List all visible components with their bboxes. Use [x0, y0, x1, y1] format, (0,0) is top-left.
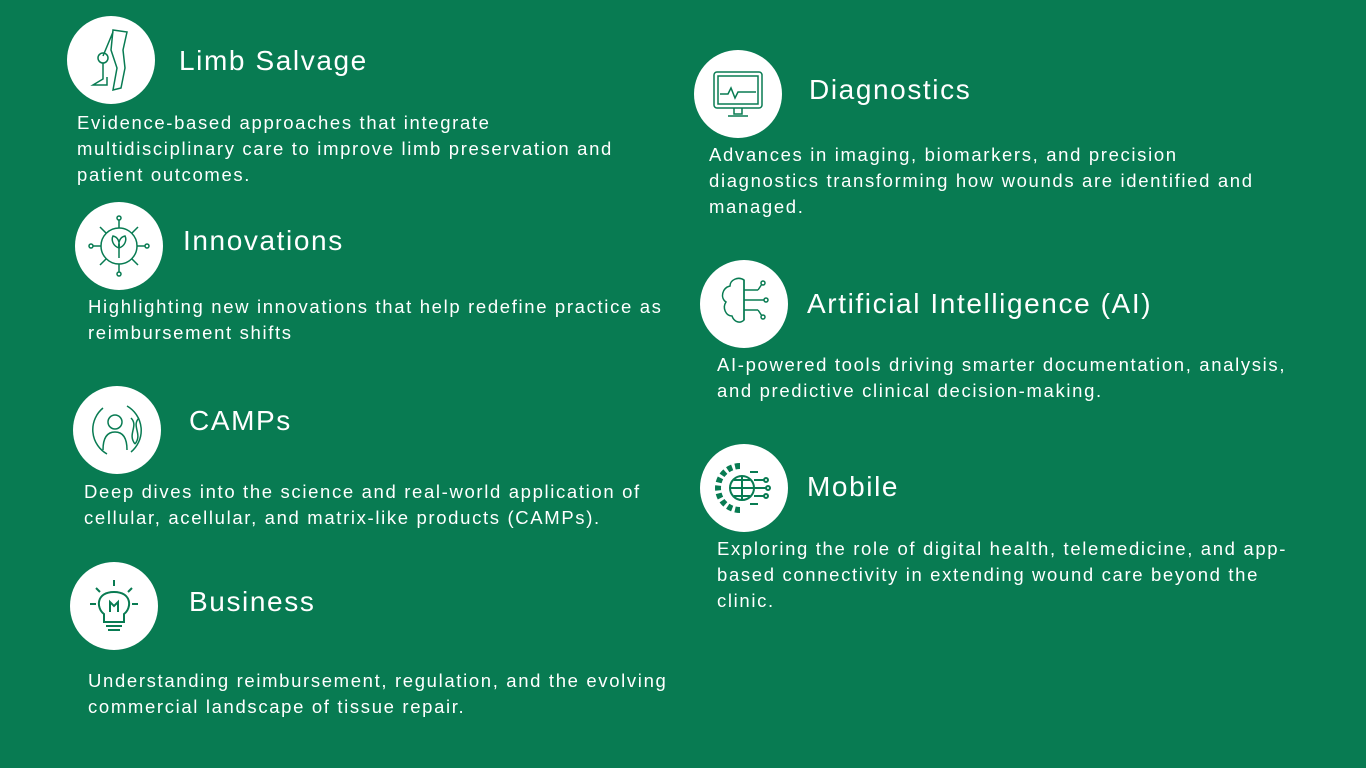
title: Limb Salvage: Limb Salvage: [179, 45, 368, 76]
icon: mobile gear globe: [700, 444, 788, 532]
title: Artificial Intelligence (AI): Artificial Intelligence (AI): [807, 288, 1152, 319]
text: diagnostics: managed.: [709, 196, 804, 217]
text: business: [88, 670, 667, 717]
text: AI: and predictive clinical decision-making.: [717, 380, 1103, 401]
title: Innovations: Innovations: [183, 225, 344, 256]
text: limb salvage: patient outcomes.: [77, 164, 251, 185]
text: diagnostics: diagnostics transforming how wounds are identified and: [709, 170, 1254, 191]
text: innovations: Highlighting new innovations that help redefine practice as: [88, 296, 663, 317]
text: limb salvage: multidisciplinary care to improve limb preservation and: [77, 138, 613, 159]
text: AI: [717, 354, 1286, 401]
text: diagnostics: [709, 144, 1254, 217]
text: mobile: [717, 538, 1287, 611]
text: business: Understanding reimbursement, regulation, and the evolving: [88, 670, 667, 691]
icon: diagnostics monitor: [694, 50, 782, 138]
text: CAMPs: Deep dives into the science and real-world application of: [84, 481, 641, 502]
text: business: commercial landscape of tissue repair.: [88, 696, 465, 717]
icon: limb: [67, 16, 155, 104]
text: CAMPs: cellular, acellular, and matrix-like products (CAMPs).: [84, 507, 601, 528]
icon: business lightbulb: [70, 562, 158, 650]
icon: CAMPs: [73, 386, 161, 474]
text: mobile: based connectivity in extending wound care beyond the: [717, 564, 1259, 585]
title: Business: Business: [189, 586, 315, 617]
text: limb salvage: Evidence-based approaches that integrate: [77, 112, 491, 133]
icon: innovations: [75, 202, 163, 290]
text: diagnostics: Advances in imaging, biomarkers, and precision: [709, 144, 1178, 165]
text: mobile: clinic.: [717, 590, 775, 611]
text: mobile: Exploring the role of digital health, telemedicine, and app-: [717, 538, 1287, 559]
title: CAMPs: CAMPs: [189, 405, 292, 436]
title: Diagnostics: Diagnostics: [809, 74, 971, 105]
text: innovations: reimbursement shifts: [88, 322, 293, 343]
text: AI: AI-powered tools driving smarter documentation, analysis,: [717, 354, 1286, 375]
icon: AI brain: [700, 260, 788, 348]
title: Mobile: Mobile: [807, 471, 899, 502]
text: CAMPs: [84, 481, 641, 528]
text: limb salvage: [77, 112, 613, 185]
text: innovations: [88, 296, 663, 343]
